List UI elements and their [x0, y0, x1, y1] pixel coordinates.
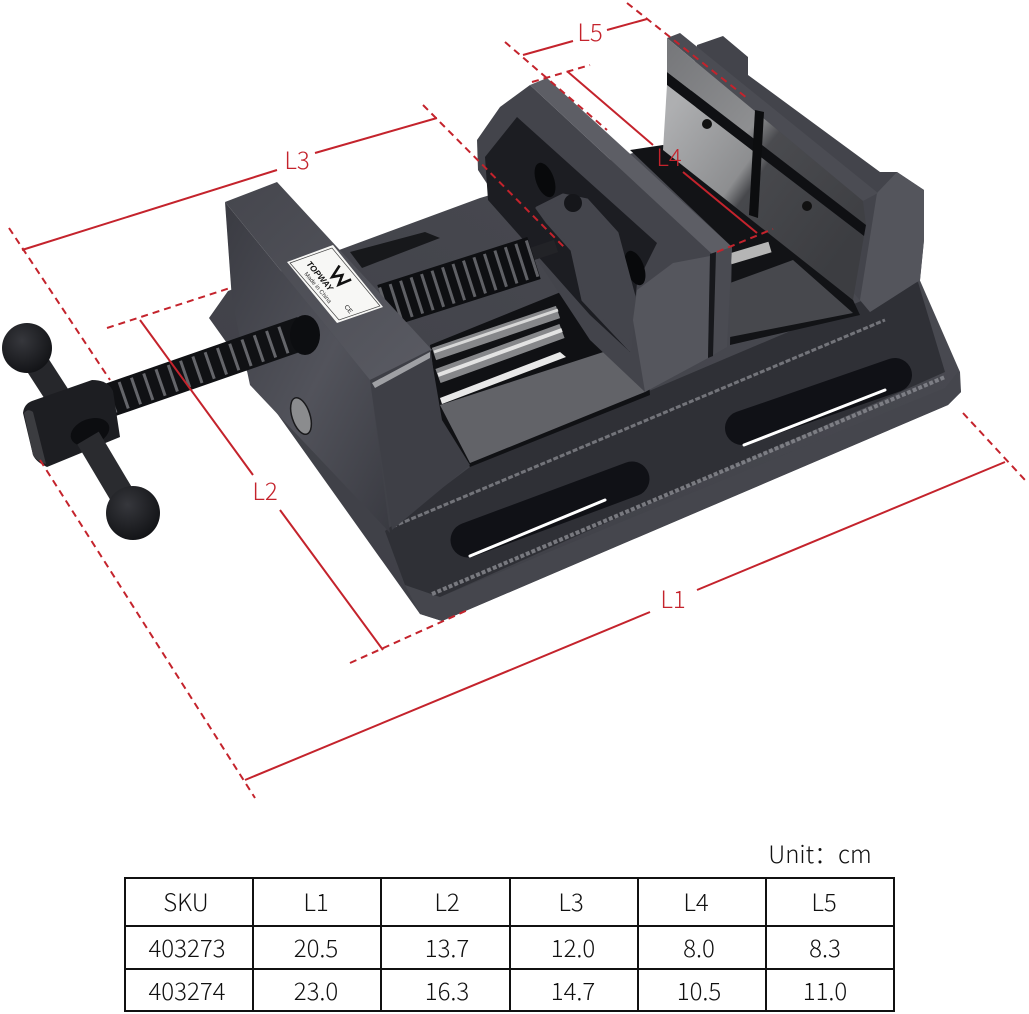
fixed jaw casting [225, 182, 470, 533]
table header row: L1 [303, 883, 329, 918]
dimension L4: L4 [656, 138, 682, 173]
table header row [163, 883, 837, 918]
guide rods [434, 310, 562, 376]
table row 403273: 8.0 [683, 929, 715, 964]
table row 403274: 403274 [148, 972, 226, 1007]
lead screw outer [110, 315, 320, 400]
table header row: L2 [434, 883, 460, 918]
rear jaw steel plate [663, 33, 878, 300]
dimension L2 [107, 288, 383, 650]
base plate [209, 148, 961, 621]
table row 403274 [148, 972, 847, 1007]
dimension L3 [9, 105, 565, 798]
dimension L1: L1 [660, 580, 686, 615]
dimension L4 [532, 65, 773, 252]
vise product illustration [2, 33, 961, 621]
nameplate label: Made in China [302, 271, 332, 305]
table row 403273 [148, 929, 841, 964]
dimensions table [125, 878, 894, 1011]
table row 403273: 403273 [148, 929, 226, 964]
dimension L3: L3 [284, 141, 310, 176]
dimension L5 [505, 3, 747, 130]
dimension L5: L5 [577, 13, 603, 48]
handle bar with ball ends [2, 323, 160, 540]
table row 403273: 12.0 [551, 929, 595, 964]
moving jaw plate [530, 78, 732, 358]
nameplate label [287, 245, 383, 323]
rear fixed jaw casting [690, 36, 924, 312]
table header row: L5 [811, 883, 837, 918]
mounting slot front [468, 479, 632, 556]
table header row: L3 [558, 883, 584, 918]
table row 403274: 23.0 [294, 972, 338, 1007]
dimension L1 [245, 413, 1025, 780]
mounting slot rear [742, 375, 895, 445]
table header row: SKU [163, 883, 209, 918]
table row 403273: 20.5 [294, 929, 338, 964]
nameplate label: CE [342, 304, 354, 316]
bed between jaws [430, 145, 860, 467]
table row 403274: 11.0 [803, 972, 847, 1007]
table row 403274: 16.3 [425, 972, 469, 1007]
moving jaw casting [477, 85, 712, 392]
table row 403273: 13.7 [425, 929, 469, 964]
nameplate label: TOPWAY [304, 259, 336, 294]
table row 403273: 8.3 [809, 929, 841, 964]
table row 403274: 10.5 [677, 972, 721, 1007]
table header row: L4 [683, 883, 709, 918]
unit note: Unit：cm [768, 835, 872, 870]
dimension L2: L2 [252, 472, 278, 507]
lead screw inner [384, 246, 556, 306]
table row 403274: 14.7 [551, 972, 595, 1007]
